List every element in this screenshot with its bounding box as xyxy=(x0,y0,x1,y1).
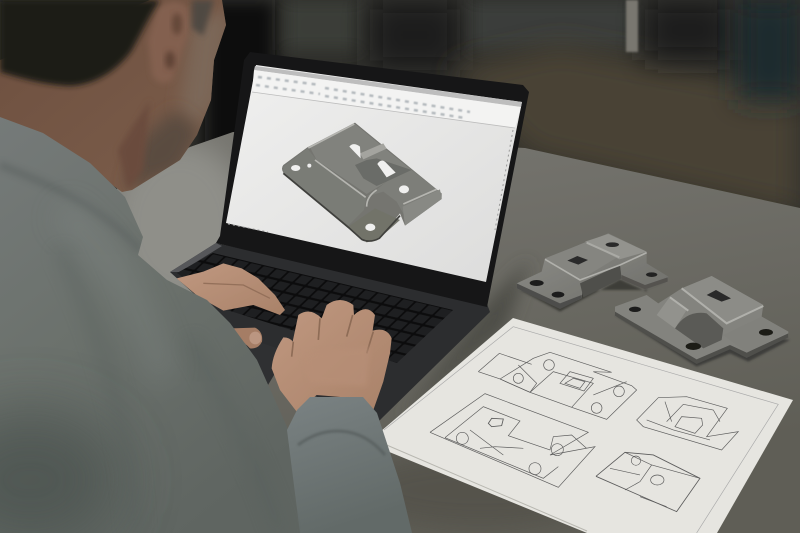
table top xyxy=(117,132,800,533)
laptop shadow xyxy=(420,268,526,397)
hair xyxy=(0,0,160,86)
background: blurred workshop xyxy=(0,0,800,208)
technical drawing sheet xyxy=(380,318,793,533)
front view xyxy=(430,394,595,487)
base side highlight xyxy=(170,243,222,272)
top view xyxy=(478,352,637,419)
keyboard xyxy=(177,253,453,363)
right hand on keyboard xyxy=(272,300,392,412)
touchpad xyxy=(246,345,274,385)
laptop lid xyxy=(216,52,529,307)
laptop screen xyxy=(226,65,522,282)
paper lower edge xyxy=(382,443,587,531)
bracket part on table: right xyxy=(615,276,790,367)
engineer's head and neck xyxy=(0,0,240,200)
neck and face skin xyxy=(0,0,240,200)
left hand on keyboard xyxy=(177,263,285,348)
CAD ribbon xyxy=(228,66,522,232)
CAD bracket model xyxy=(282,123,442,242)
laptop base xyxy=(170,243,490,422)
shirt shading xyxy=(0,164,130,533)
sleeve and cuff xyxy=(287,397,412,533)
paper xyxy=(380,318,793,533)
engineer's shirt with rolled cuff xyxy=(0,117,412,533)
drawing views xyxy=(384,327,778,533)
sleeve fold xyxy=(298,431,385,455)
laptop xyxy=(170,52,529,422)
bracket part on table: left xyxy=(517,233,668,312)
side view xyxy=(637,397,738,450)
bottom view xyxy=(596,452,700,512)
